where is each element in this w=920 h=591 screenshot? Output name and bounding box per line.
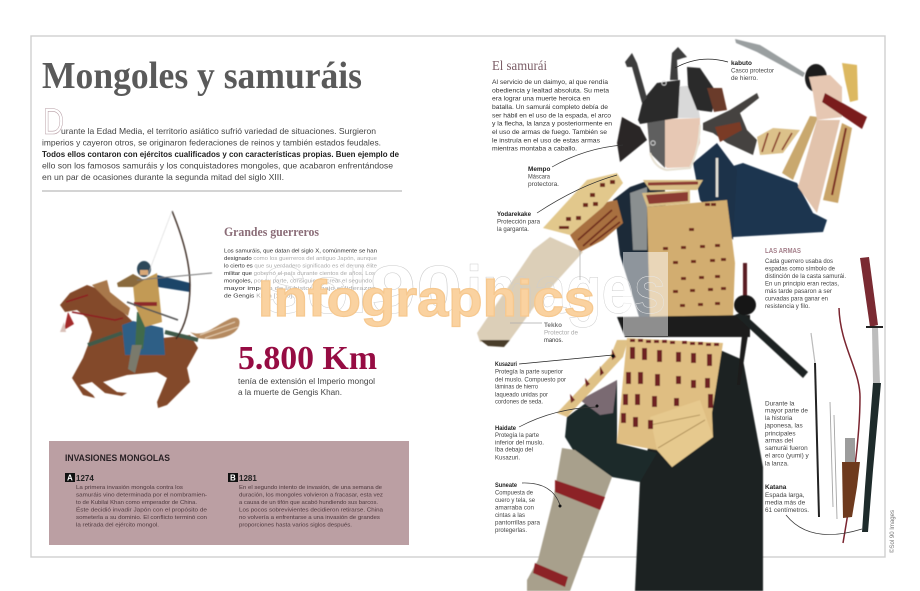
invasion A: 1274 <box>65 473 207 528</box>
callout: suneate: protegerlas. <box>495 527 527 534</box>
callout: suneate: cuero y tela, se <box>495 497 535 504</box>
text block: Grandes guerreros: Los samuráis, que datan del siglo X, comúnmente se han <box>224 248 377 254</box>
text block: Las armas: En un principio eran rectas, <box>765 281 839 288</box>
text block: bow and spear note: mayor parte de <box>765 408 808 415</box>
invasion A: 1274: la retirada del ejército mongol. <box>76 522 159 528</box>
text block: bow and spear note: armas del <box>765 438 793 445</box>
callout: kabuto: kabuto <box>731 60 752 67</box>
panel: Invasiones mongolas <box>49 441 409 545</box>
samurai: torso <box>613 143 737 320</box>
intro text block: D <box>43 101 64 142</box>
intro text block: imperios y cayeron otros, se originaron federaciones de reinos y también estados feudales. <box>42 138 381 148</box>
callout: yodarekake: Protección para <box>497 218 540 226</box>
callout: tekko <box>510 250 580 344</box>
text block: Grandes guerreros: militar que gobernó el país durante cientos de años. Los <box>224 271 375 277</box>
weapon: quiver <box>842 438 860 518</box>
text block: Las armas: distinción de la casta samurái. <box>765 273 846 280</box>
callout: suneate <box>495 482 562 534</box>
copyright credit: ©Sol 90 Images <box>888 509 896 553</box>
heading: El samurái: El samurái <box>492 58 547 73</box>
callout: haidate: Haidate <box>495 425 516 432</box>
callout: mempo: protectora. <box>528 181 559 188</box>
intro text block: Todos ellos contaron con ejércitos cualificados y con características propias. Buen ejemplo de <box>42 150 399 159</box>
text block: El samurái: le instruía en el uso de estas armas <box>492 137 601 144</box>
callout: kusazuri: Protegía la parte superior <box>495 369 564 376</box>
text block: Las armas: Cada guerrero usaba dos <box>765 258 833 265</box>
samurai: left arm with shoulder plates <box>477 173 623 347</box>
text block: Grandes guerreros: lo cierto es que su verdadero significado es el de una élite <box>224 264 377 270</box>
invasion B: 1281: proporciones hasta varios siglos después. <box>239 522 352 528</box>
statistic: 5.800 Km: a la muerte de Gengis Khan. <box>238 387 342 397</box>
callout: kusazuri <box>495 354 614 406</box>
intro text block: urante la Edad Media, el territorio asiático sufrió variedad de situaciones. Surgieron <box>61 127 376 136</box>
text block: El samurái: ser hábil en el uso de la espada, el arco <box>492 112 611 119</box>
callout: tekko: manos. <box>544 337 563 344</box>
text block: bow and spear note <box>764 400 809 467</box>
weapon: katana <box>860 257 883 532</box>
callout: suneate: Compuesta de <box>495 489 533 496</box>
samurai: shin guard <box>527 448 612 591</box>
illustration: mounted Mongol archer <box>60 211 240 408</box>
text block: bow and spear note: la historia <box>765 415 793 422</box>
callout: suneate: Suneate <box>495 482 517 489</box>
watermark: Sol90images outline: 90 <box>370 252 462 328</box>
text block: bow and spear note: japonesa, las <box>764 423 803 430</box>
callout: katana: media más de <box>765 500 806 506</box>
invasion B: 1281: B <box>230 474 236 482</box>
callout: katana <box>765 484 862 535</box>
text block: bow and spear note: principales <box>765 430 796 437</box>
callout: kabuto: Casco protector <box>731 68 775 74</box>
invasion A: 1274: samuráis vino determinada por el nombramien- <box>76 492 207 498</box>
intro text block: ello son los famosos samuráis y los conquistadores mongoles, que acabaron enfrentándose <box>42 162 393 170</box>
callout: haidate: Protegía la parte <box>495 432 539 439</box>
text block: El samurái: obediencia y lealtad absoluta. Su meta <box>492 87 609 94</box>
invasion B: 1281 <box>228 473 384 528</box>
invasion B: 1281: En el segundo intento de invasión, de una semana de <box>239 485 382 491</box>
text block: bow and spear note: la lanza. <box>765 460 789 467</box>
title: Mongoles y samuráis <box>42 55 362 97</box>
intro text block: en un par de ocasiones durante la segunda mitad del siglo XIII. <box>42 173 284 182</box>
text block: Grandes guerreros: designado como los guerreros del antiguo Japón, aunque <box>224 256 377 262</box>
text block: El samurái: batalla. Un samurái completo debía de <box>492 104 608 111</box>
statistic: 5.800 Km: 5.800 Km <box>238 340 377 377</box>
callout: haidate: inferior del muslo. <box>495 439 544 446</box>
callout: kusazuri: láminas de hierro <box>495 384 538 391</box>
invasion B: 1281: duración, los mongoles volvieron a fracasar, esta vez <box>239 492 383 498</box>
text block: Las armas: curvadas para ganar en <box>765 296 828 303</box>
callout: mempo <box>528 145 623 188</box>
callout: katana: Katana <box>765 484 787 491</box>
invasion A: 1274: to de Kubilai Khan como emperador de China. <box>76 500 197 506</box>
callout: yodarekake: la garganta. <box>497 226 529 233</box>
callout: suneate: amarraba con <box>495 504 534 511</box>
samurai: kusazuri thigh armour <box>557 338 723 467</box>
invasion B: 1281: 1281 <box>239 474 257 483</box>
callout: mempo: Máscara <box>528 174 550 180</box>
heading: Grandes guerreros: Grandes guerreros <box>224 224 319 239</box>
watermark: translucent square <box>623 252 668 336</box>
watermark: Sol90images outline <box>262 252 666 328</box>
intro text block <box>42 101 399 182</box>
callout: suneate: pantorrillas para <box>495 519 540 526</box>
callout: tekko: Protector de <box>544 330 578 336</box>
invasion A: 1274: A <box>67 474 73 482</box>
callout: yodarekake: Yodarekake <box>497 211 531 218</box>
samurai: sword raised overhead <box>735 39 867 129</box>
text block: El samurái: y la flecha, la lanza y posteriormente en <box>492 121 612 128</box>
callout: tekko: Tekko <box>544 322 562 329</box>
callout: katana: 61 centímetros. <box>765 507 809 514</box>
callout: suneate: cintas a las <box>495 512 525 519</box>
watermark: Sol90images outline: Sol <box>262 253 367 327</box>
watermark: Infographics: Infographics <box>258 270 595 327</box>
text block: bow and spear note: Durante la <box>765 400 795 407</box>
invasion A: 1274: 1274 <box>76 474 94 483</box>
callout: kusazuri: cordones de seda. <box>495 399 543 406</box>
text block: El samurái <box>492 79 612 153</box>
weapon: yari spear <box>811 333 819 517</box>
text block: Grandes guerreros: de Gengis Khan [1206]. <box>224 294 294 300</box>
samurai: hakama trousers <box>635 350 763 591</box>
samurai: belt and second sword <box>617 263 808 385</box>
text block: Las armas <box>765 248 846 310</box>
watermark: Sol90images outline: images <box>466 252 666 328</box>
text block: Las armas: LAS ARMAS <box>765 248 801 255</box>
statistic: 5.800 Km: tenía de extensión el Imperio mongol <box>238 376 375 386</box>
panel heading: INVASIONES MONGOLAS <box>65 453 170 464</box>
weapon: yumi bow <box>839 308 860 543</box>
invasion B: 1281: Los pocos sobrevivientes decidieron retirarse. China <box>239 508 384 514</box>
text block: El samurái: Al servicio de un daimyo, al que rendía <box>492 79 608 86</box>
text block: Grandes guerreros: mongoles, por su parte, consiguieron crear el segundo <box>224 278 372 284</box>
text block: bow and spear note: samurái fueron <box>765 445 808 452</box>
samurai: helmet and face <box>617 47 727 170</box>
samurai: right shoulder guard <box>703 93 759 155</box>
text block: Grandes guerreros <box>224 248 377 300</box>
callout: kusazuri: del muslo. Compuesto por <box>495 376 567 383</box>
illustration: weapons <box>811 257 883 543</box>
weapon: arrows <box>830 402 837 519</box>
text block: bow and spear note: el arco (yumi) y <box>765 453 809 460</box>
text block: Las armas: espadas como símbolo de <box>765 266 835 273</box>
illustration: samurai in armour <box>477 39 867 591</box>
text block: El samurái: era lograr una muerte heroica en <box>492 96 590 103</box>
text block: Las armas: más tarde pasaron a ser <box>765 288 833 295</box>
text block: El samurái: mientras montaba a caballo. <box>492 146 577 153</box>
callout: kabuto: de hierro. <box>731 75 758 82</box>
invasion B: 1281: no volvería a enfrentarse a una invasión de grandes <box>239 515 380 521</box>
callout: yodarekake <box>497 175 617 233</box>
invasion A: 1274: Éste decidió invadir Japón con el propósito de <box>76 506 207 514</box>
invasion B: 1281: a causa de un tifón que acabó hundiendo sus barcos. <box>239 500 378 506</box>
statistic: 5.800 Km <box>238 340 377 397</box>
callout: katana: Espada larga, <box>765 492 805 499</box>
callout: kabuto <box>675 59 775 82</box>
text block: Grandes guerreros: mayor imp erio de la historia bajo el liderazgo <box>224 286 376 292</box>
callout: haidate <box>495 404 598 461</box>
callout: haidate: Iba debajo del <box>495 447 533 454</box>
callout: mempo: Mempo <box>528 166 550 173</box>
invasion A: 1274: someterla a su dominio. El conflicto terminó con <box>76 515 207 521</box>
callout: kusazuri: Kusazuri <box>495 361 517 368</box>
callout: kusazuri: laqueado unidas por <box>495 391 549 398</box>
invasion A: 1274: La primera invasión mongola contra los <box>76 485 183 491</box>
text block: Las armas: resistencia y filo. <box>765 303 810 310</box>
samurai: sleeve and raised arm <box>720 116 852 237</box>
text block: El samurái: el uso de armas de fuego. También se <box>492 129 607 136</box>
callout: haidate: Kusazuri. <box>495 454 520 461</box>
